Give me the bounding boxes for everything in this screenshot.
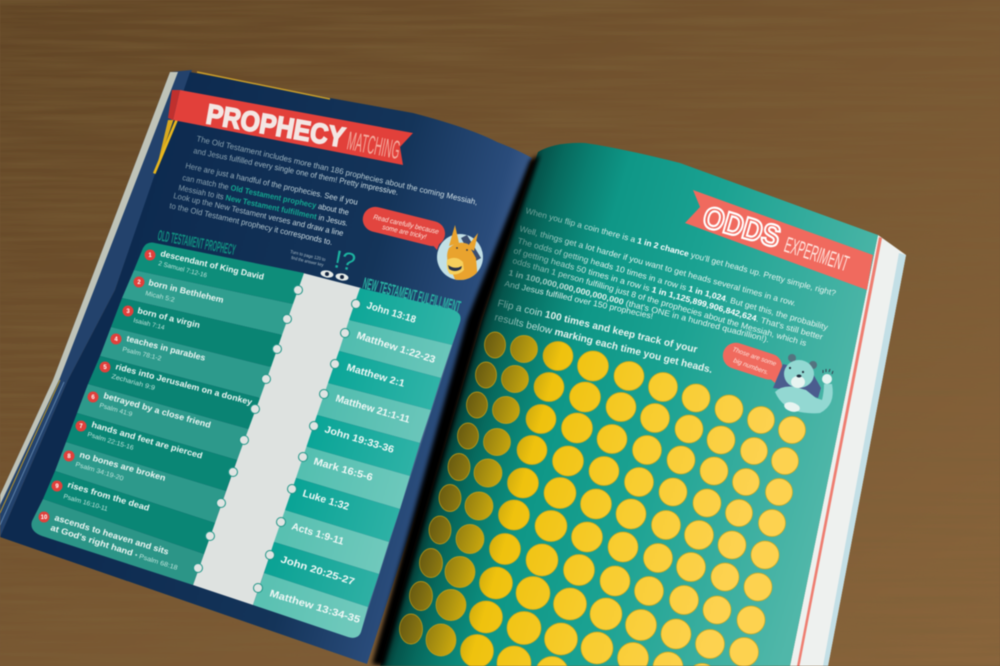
row 8: 8 <box>67 454 71 460</box>
panel: center white strip <box>193 273 361 605</box>
text block: odds explanation: odds than 1 person fulfilling just 8 of the prophecies about the Messiah, which is <box>511 256 807 348</box>
row 2: born in Bethlehem <box>148 277 225 305</box>
row 10: 10 <box>41 515 48 521</box>
verse: acts 1:9-11: Acts 1:9-11 <box>290 521 345 548</box>
row 5: Zechariah 9:9 <box>110 373 156 392</box>
icon: eyes <box>320 269 349 282</box>
verse: mark 16:5-6: Mark 16:5-6 <box>312 456 374 484</box>
text block: intro: The Old Testament includes more than 186 prophecies about the coming Messiah, <box>196 134 478 207</box>
row 4: Psalm 78:1-2 <box>122 346 162 363</box>
row 3: born of a virgin <box>137 305 201 330</box>
verse: john 20:25-27: John 20:25-27 <box>279 554 356 588</box>
row 10: at God's right hand • Psalm 68:18 <box>49 522 180 572</box>
matching dots <box>194 286 360 592</box>
title: prophecy: PROPHECY <box>204 98 347 153</box>
row 5: 5 <box>103 365 107 371</box>
row 3: 3 <box>126 309 130 315</box>
text block: instruction: results below marking each time you get heads. <box>493 312 714 376</box>
yellow page edge line <box>197 72 330 99</box>
text block: intro: Messiah to its New Testament fulfillment in Jesus. <box>178 183 349 228</box>
row 6: betrayed by a close friend <box>102 390 212 430</box>
callout: read carefully <box>360 204 448 250</box>
row 6: Psalm 41:9 <box>98 402 133 418</box>
title: odds: ODDS <box>699 199 785 255</box>
row 9: Psalm 16:10-11 <box>62 493 109 513</box>
verse: matthew 21:1-11: Matthew 21:1-11 <box>334 393 411 426</box>
note: answer key: Turn to page 120 to <box>290 249 326 262</box>
row 9: 9 <box>55 484 59 490</box>
verse: matthew 1:22-23: Matthew 1:22-23 <box>355 330 437 366</box>
row 9: rises from the dead <box>66 479 151 513</box>
row 10: ascends to heaven and sits <box>53 512 170 557</box>
verse: matthew 13:34-35: Matthew 13:34-35 <box>268 588 362 626</box>
text block: odds explanation <box>504 206 837 348</box>
row 2: 2 <box>137 280 141 286</box>
row 1: 2 Samuel 7:12-16 <box>157 260 208 280</box>
title banner: prophecy matching <box>168 90 413 165</box>
icon: bear <box>773 354 833 413</box>
row 2: Micah 5:2 <box>145 290 176 304</box>
row 4: 4 <box>114 337 118 343</box>
panel: old testament rows <box>31 243 304 585</box>
row 6: 6 <box>91 395 95 401</box>
title banner: odds experiment <box>685 190 873 290</box>
text block: intro: can match the Old Testament prophecy about the <box>182 173 350 217</box>
text block: odds explanation: The odds of getting heads 10 times in a row is 1 in 1,024. But get this, the probability <box>516 236 830 332</box>
row 7: hands and feet are pierced <box>90 419 204 461</box>
text block: odds explanation: of getting heads 50 times in a row is 1 in 1,125,899,906,842,624 . That's still better <box>512 246 824 342</box>
title banner: odds experiment: EXPERIMENT <box>781 232 852 276</box>
verse: luke 1:32: Luke 1:32 <box>301 488 351 513</box>
coin grid: 100 coins <box>400 332 806 666</box>
row 4: teaches in parables <box>126 333 207 363</box>
icon: donkey <box>437 225 483 282</box>
text block: odds explanation: When you flip a coin there is a 1 in 2 chance you'll get heads up. Pretty simple, right? <box>524 206 837 298</box>
text block: instruction: Flip a coin 100 times and keep track of your <box>496 298 699 356</box>
text block: odds explanation: And Jesus fulfilled over 150 prophecies! <box>504 279 654 321</box>
text block: intro: and Jesus fulfilled every single one of them! Pretty impressive. <box>193 146 399 197</box>
row 7: 7 <box>79 424 83 430</box>
text block: odds explanation: Well, things get a lot harder if you want to get heads several times in a row. <box>518 224 797 308</box>
row 8: no bones are broken <box>78 449 167 483</box>
book photo: NEW TESTAMENT FULFILLMENT <box>361 275 462 316</box>
callout: big numbers: big numbers. <box>732 357 770 377</box>
verse: matthew 2:1: Matthew 2:1 <box>345 362 406 390</box>
text block: intro: Here are just a handful of the prophecies. See if you <box>185 161 359 207</box>
panel: right page teal <box>380 143 878 666</box>
row 7: Psalm 22:15-16 <box>86 431 135 452</box>
row 3: Isaiah 7:14 <box>133 317 166 332</box>
text block: intro: to the Old Testament prophecy it corresponds to. <box>169 201 333 247</box>
right page edge stack <box>790 235 906 666</box>
panel: left page navy <box>0 72 532 664</box>
gutter shadow <box>372 155 540 666</box>
book photo: MATCHING <box>345 125 403 165</box>
row 5: rides into Jerusalem on a donkey <box>114 361 254 407</box>
text block: intro <box>169 134 478 247</box>
callout: read carefully: Read carefully because <box>373 214 440 236</box>
left page edge stack <box>0 70 192 537</box>
row 8: Psalm 34:19-20 <box>74 461 125 483</box>
callout: big numbers <box>719 339 786 383</box>
text block: intro: Look up the New Testament verses and draw a line <box>173 191 345 238</box>
yellow margin accent <box>153 118 178 174</box>
row 1: 1 <box>148 253 152 259</box>
callout: read carefully: some are tricky! <box>382 224 427 241</box>
note: answer key second line: find the answer key <box>291 255 325 268</box>
icon: interrobang: !? <box>332 245 358 277</box>
text block: odds explanation: 1 in 100,000,000,000,000,000 (that's ONE in a hundred quadrillion!). <box>507 268 770 344</box>
panel: new testament rows <box>253 288 461 638</box>
callout: big numbers: Those are some <box>731 346 777 368</box>
verse: john 19:33-36: John 19:33-36 <box>323 424 396 456</box>
verse: john 13:18: John 13:18 <box>365 300 418 326</box>
row 1: descendant of King David <box>160 248 265 282</box>
book photo: OLD TESTAMENT PROPHECY <box>156 227 237 259</box>
